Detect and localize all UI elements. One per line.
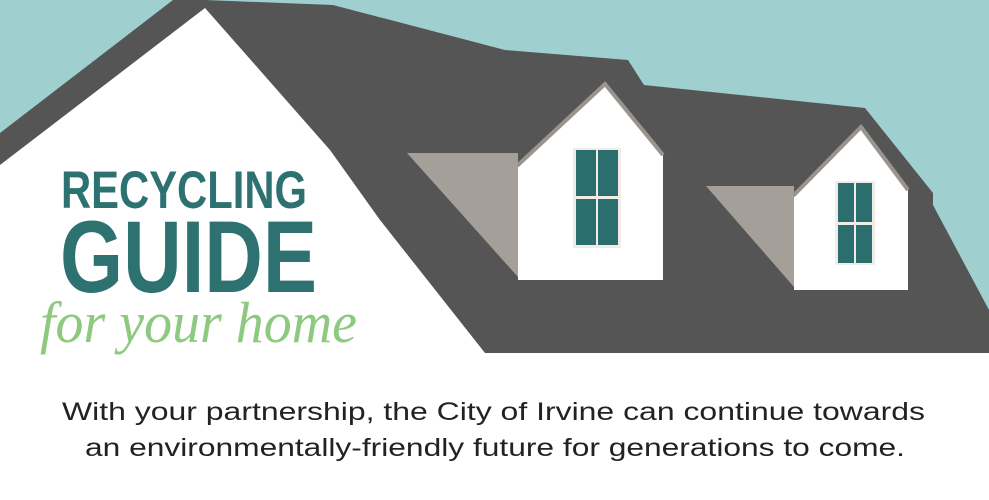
intro text: With your partnership, the City of Irvine can continue towards [62, 398, 925, 426]
house roof [0, 0, 989, 363]
window right [835, 181, 875, 265]
title: GUIDE: GUIDE [60, 200, 317, 314]
title: RECYCLING: RECYCLING [61, 161, 307, 220]
dormer left [407, 82, 663, 280]
intro text: an environmentally-friendly future for generations to come. [85, 434, 905, 462]
dormer right [706, 125, 908, 290]
gable white wall [0, 8, 485, 353]
intro text [62, 398, 925, 462]
lower white ground [0, 353, 989, 363]
sky background [0, 0, 989, 360]
subtitle: for your home: for your home [40, 290, 357, 355]
window left [573, 148, 621, 248]
